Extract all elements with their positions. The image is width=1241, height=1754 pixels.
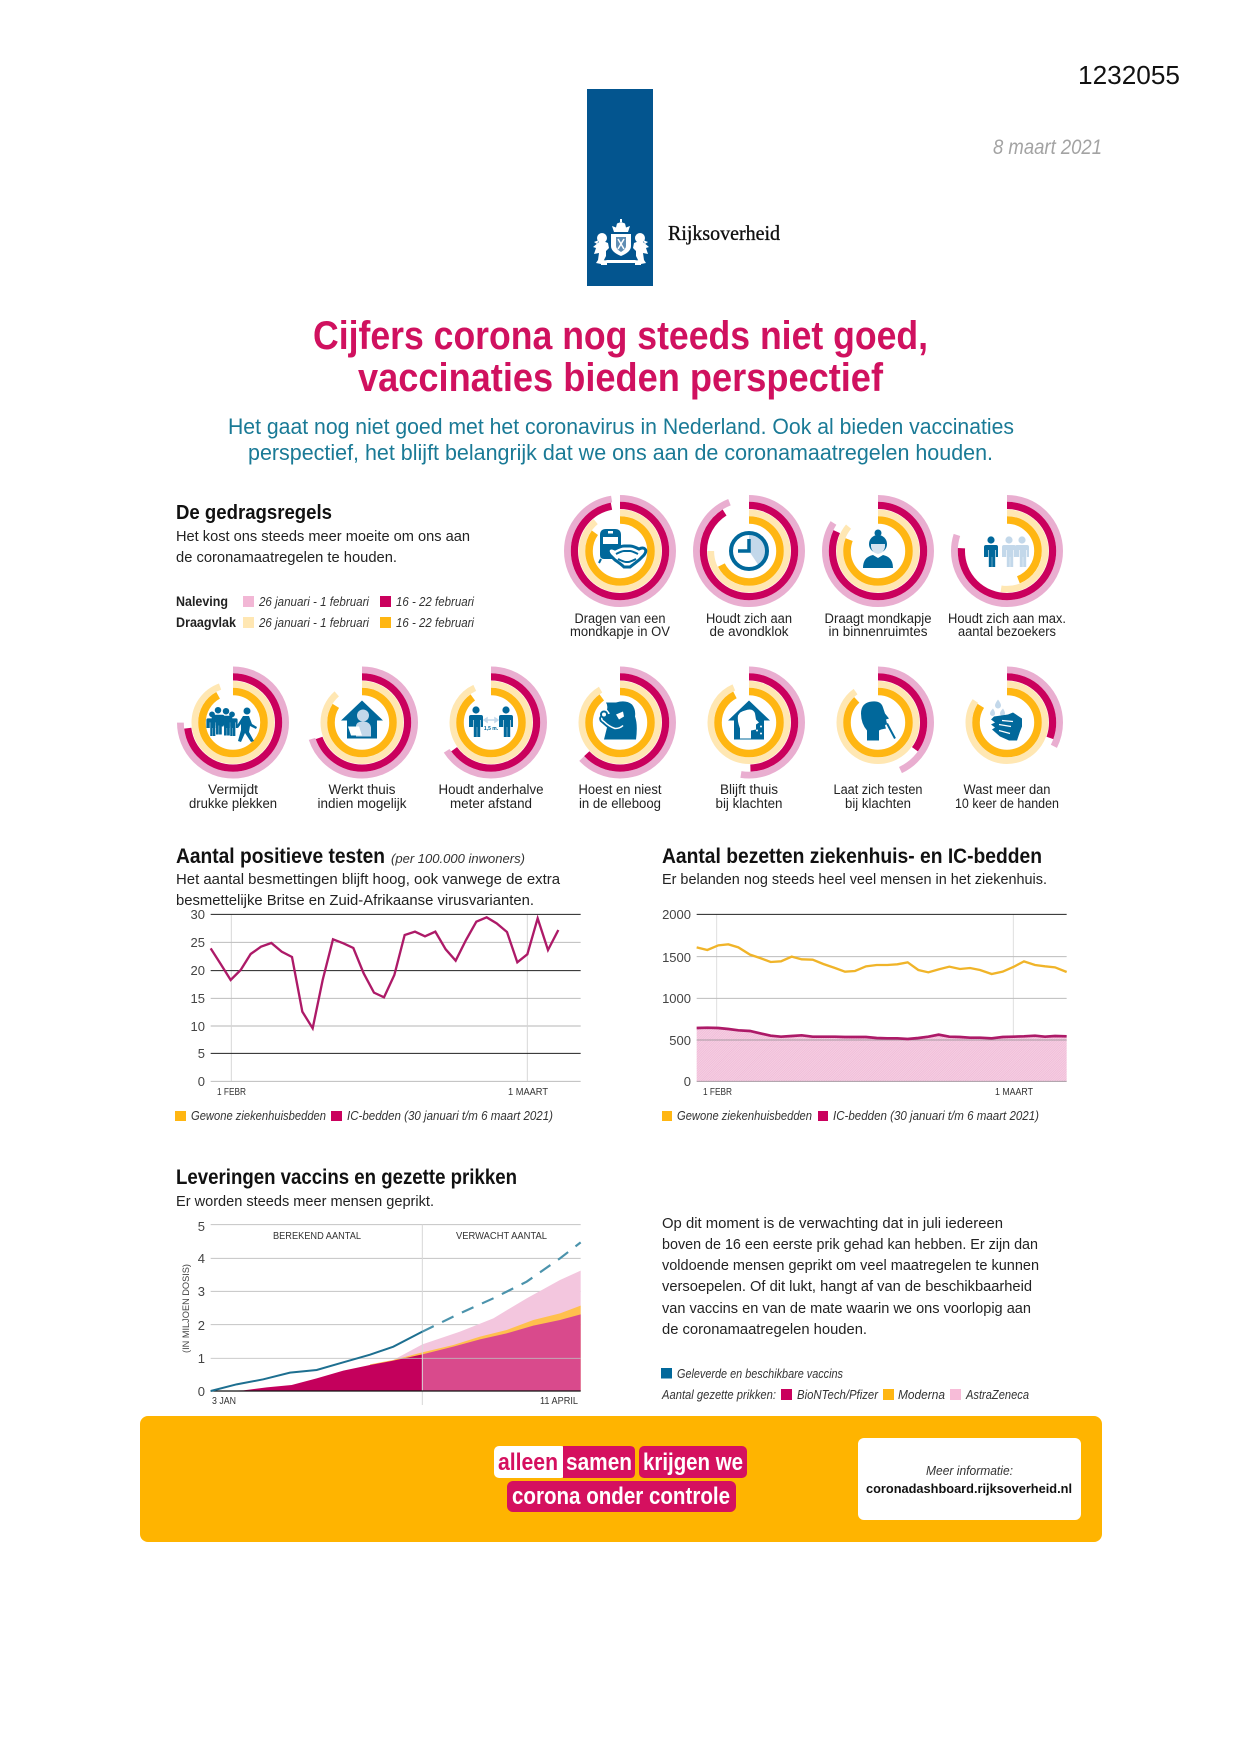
legend: naleving and draagvlak: 26 januari - 1 februari [258, 615, 370, 630]
intro text: perspectief, het blijft belangrijk dat we ons aan de coronamaatregelen houden. [248, 440, 993, 465]
description: Het aantal besmettingen blijft hoog, ook vanwege de extra [176, 871, 561, 888]
legend [175, 1108, 553, 1123]
label: Wast meer dan [964, 782, 1050, 797]
label [824, 611, 932, 639]
legend: naleving and draagvlak: 16 - 22 februari [396, 594, 475, 609]
label [716, 782, 782, 811]
slogan: alleen [498, 1449, 558, 1476]
legend: vaccins: BioNTech/Pfizer [797, 1387, 879, 1402]
line chart: positieve testen: 5 [198, 1046, 205, 1061]
label [570, 611, 670, 639]
text block: verwachting vaccinaties: boven de 16 een eerste prik gehad kan hebben. Er zijn dan [662, 1236, 1038, 1253]
label: bij klachten [845, 796, 911, 811]
legend: Gewone ziekenhuisbedden [191, 1108, 326, 1123]
line chart: bedden: 1 FEBR [703, 1087, 732, 1098]
label: bij klachten [716, 796, 782, 811]
description: Er belanden nog steeds heel veel mensen in het ziekenhuis. [662, 871, 1047, 888]
area chart: vaccins: 5 [198, 1219, 205, 1234]
icon: washing hands [990, 700, 1022, 740]
title: vaccinaties bieden perspectief [358, 356, 884, 400]
slogan: samen [566, 1449, 632, 1476]
legend: vaccins: Moderna [898, 1387, 945, 1402]
slogan: krijgen we [643, 1449, 743, 1476]
text block: verwachting vaccinaties: van vaccins en van de mate waarin we ons voorlopig aan [662, 1300, 1031, 1317]
area chart: vaccins: VERWACHT AANTAL [456, 1231, 547, 1242]
logo: Rijksoverheid [587, 89, 780, 286]
description [176, 528, 470, 566]
panel: leveringen vaccins [176, 1166, 581, 1407]
line chart: positieve testen: 25 [191, 935, 205, 950]
icon: crowd and walking person [206, 707, 257, 742]
label [578, 782, 662, 811]
text block: verwachting vaccinaties: versoepelen. Of dit lukt, hangt af van de beschikbaarheid [662, 1278, 1032, 1295]
line chart: positieve testen: 1 FEBR [217, 1087, 246, 1098]
ring chart: avondklok [696, 498, 802, 639]
icon: person working at home [341, 700, 383, 738]
panel: bezette ziekenhuisbedden [662, 845, 1067, 1123]
area chart: vaccins: 2 [198, 1318, 205, 1333]
label: Hoest en niest [578, 782, 662, 797]
area chart: vaccins [181, 1219, 581, 1407]
legend: Gewone ziekenhuisbedden [677, 1108, 812, 1123]
label: aantal bezoekers [958, 624, 1056, 639]
heading note: (per 100.000 inwoners) [391, 851, 525, 866]
intro text [228, 414, 1014, 465]
slogan [494, 1446, 747, 1512]
slogan: corona onder controle [512, 1483, 730, 1510]
line chart: bedden: 2000 [662, 907, 691, 922]
icon: two people at distance: 1,5 m. [484, 726, 499, 732]
area chart: vaccins: 0 [198, 1384, 205, 1399]
document number: 1232055 [1078, 60, 1180, 90]
ring chart: maximaal aantal bezoekers [948, 498, 1066, 639]
legend: naleving and draagvlak: Draagvlak [176, 615, 236, 630]
description [176, 871, 561, 909]
icon: head with test swab [861, 701, 895, 740]
label: Werkt thuis [328, 782, 396, 797]
line chart: bedden: 500 [669, 1033, 691, 1048]
icon: train and face mask [599, 529, 646, 567]
intro text: Het gaat nog niet goed met het coronavirus in Nederland. Ook al bieden vaccinaties [228, 414, 1014, 439]
line chart: bedden: 1000 [662, 991, 691, 1006]
heading: Leveringen vaccins en gezette prikken [176, 1166, 517, 1189]
title: Cijfers corona nog steeds niet goed, [313, 314, 928, 358]
legend: vaccins: Aantal gezette prikken: [661, 1387, 776, 1402]
line chart: bedden: 0 [684, 1074, 691, 1089]
ring chart: anderhalve meter [438, 670, 544, 811]
area chart: vaccins: 3 JAN [212, 1396, 236, 1407]
ring chart: mondkapje binnenruimtes [824, 498, 932, 639]
legend [662, 1108, 1039, 1123]
line chart: bedden: 1 MAART [995, 1087, 1033, 1098]
area chart: vaccins: (IN MILJOEN DOSIS) [181, 1264, 192, 1353]
area chart: vaccins: 4 [198, 1251, 205, 1266]
legend: vaccins: AstraZeneca [965, 1387, 1029, 1402]
label: Dragen van een [574, 611, 666, 626]
label [948, 611, 1066, 639]
area chart: vaccins: BEREKEND AANTAL [273, 1231, 361, 1242]
icon: coat of arms [593, 219, 649, 265]
legend: vaccins [661, 1366, 1029, 1402]
label: de avondklok [710, 624, 789, 639]
info box: coronadashboard.rijksoverheid.nl [866, 1481, 1072, 1496]
label [834, 782, 922, 811]
ring chart: hoesten in elleboog [567, 670, 673, 811]
heading: De gedragsregels [176, 502, 332, 524]
ring chart: handen wassen [954, 670, 1060, 811]
ring chart: drukke plekken [180, 670, 286, 811]
legend: IC-bedden (30 januari t/m 6 maart 2021) [347, 1108, 553, 1123]
label: Houdt zich aan max. [948, 611, 1066, 626]
label: 10 keer de handen [955, 796, 1059, 811]
label: Houdt anderhalve [438, 782, 544, 797]
icon: house with coughing person [728, 700, 770, 740]
area chart: vaccins: 1 [198, 1351, 205, 1366]
description: Er worden steeds meer mensen geprikt. [176, 1193, 434, 1210]
line chart: positieve testen [191, 907, 581, 1098]
label: Draagt mondkapje [824, 611, 932, 626]
title [313, 314, 928, 400]
label [438, 782, 544, 811]
label: Laat zich testen [834, 782, 922, 797]
ring chart: testen bij klachten [825, 670, 931, 811]
label: Vermijdt [208, 782, 258, 797]
label [955, 782, 1059, 811]
panel: aantal positieve testen [175, 845, 581, 1123]
icon: coughing into elbow [599, 701, 637, 740]
label: Houdt zich aan [706, 611, 792, 626]
label: in binnenruimtes [828, 624, 928, 639]
text block: verwachting vaccinaties: de coronamaatregelen houden. [662, 1321, 867, 1338]
description: besmettelijke Britse en Zuid-Afrikaanse virusvarianten. [176, 892, 534, 909]
text block: verwachting vaccinaties [662, 1215, 1039, 1338]
legend: IC-bedden (30 januari t/m 6 maart 2021) [833, 1108, 1039, 1123]
heading: Aantal bezetten ziekenhuis- en IC-bedden [662, 845, 1042, 868]
line chart: positieve testen: 30 [191, 907, 205, 922]
label: meter afstand [450, 796, 532, 811]
date: 8 maart 2021 [993, 136, 1102, 159]
label: Blijft thuis [720, 782, 778, 797]
ring chart: thuis bij klachten [696, 670, 802, 811]
panel: de gedragsregels intro [176, 502, 475, 630]
label: drukke plekken [189, 796, 277, 811]
line chart: positieve testen: 15 [191, 991, 205, 1006]
icon: two people at distance [469, 706, 513, 737]
line chart: positieve testen: 1 MAART [508, 1087, 548, 1098]
icon: three people [984, 536, 1029, 567]
info box: Meer informatie: [926, 1463, 1013, 1478]
label [189, 782, 277, 811]
area chart: vaccins: 3 [198, 1284, 205, 1299]
icon: woman with face mask [863, 530, 893, 568]
line chart: positieve testen: 20 [191, 963, 205, 978]
ring chart: thuiswerken [309, 670, 415, 811]
icon: clock [731, 533, 767, 569]
legend: naleving and draagvlak: 16 - 22 februari [396, 615, 475, 630]
legend: naleving and draagvlak: 26 januari - 1 februari [258, 594, 370, 609]
line chart: positieve testen: 0 [198, 1074, 205, 1089]
line chart: bedden [662, 907, 1067, 1098]
label [318, 782, 407, 811]
label: mondkapje in OV [570, 624, 670, 639]
description: Het kost ons steeds meer moeite om ons aan [176, 528, 470, 545]
footer banner [140, 1416, 1102, 1542]
legend: vaccins: Geleverde en beschikbare vaccins [677, 1366, 843, 1381]
logo wordmark: Rijksoverheid [668, 221, 780, 245]
heading: Aantal positieve testen [176, 845, 385, 868]
legend: naleving and draagvlak: Naleving [176, 594, 228, 609]
label: indien mogelijk [318, 796, 407, 811]
description: de coronamaatregelen te houden. [176, 549, 397, 566]
label: in de elleboog [579, 796, 661, 811]
legend: naleving and draagvlak [176, 594, 475, 630]
ring chart: mondkapje in OV [567, 498, 673, 639]
text block: verwachting vaccinaties: voldoende mensen geprikt om veel maatregelen te kunnen [662, 1257, 1039, 1274]
text block: verwachting vaccinaties: Op dit moment is de verwachting dat in juli iedereen [662, 1215, 1003, 1232]
info box [858, 1438, 1081, 1520]
line chart: positieve testen: 10 [191, 1019, 205, 1034]
area chart: vaccins: 11 APRIL [540, 1396, 578, 1407]
label [706, 611, 792, 639]
line chart: bedden: 1500 [662, 950, 691, 965]
